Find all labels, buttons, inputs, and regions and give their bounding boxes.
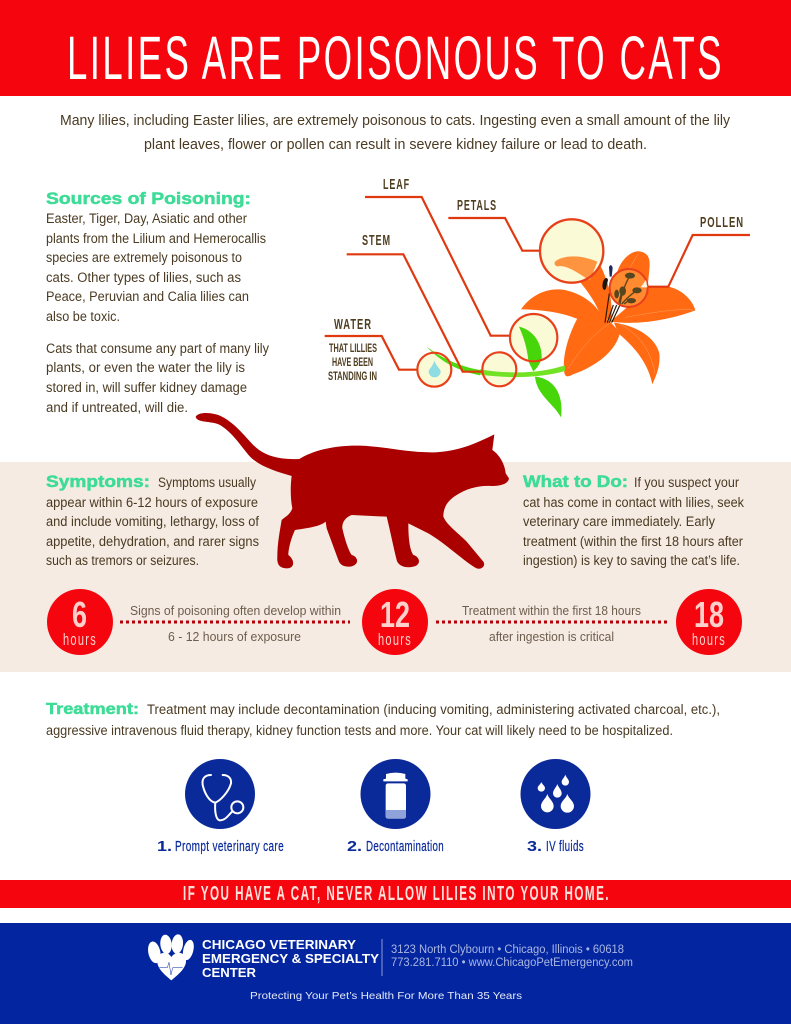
timeline marker: 12 hours: hours [378,630,412,649]
panel: symptoms: appetite, dehydration, and rarer signs [46,534,259,549]
icon: fluid drops [520,759,590,829]
contact details: 773.281.7110 • www.ChicagoPetEmergency.com [391,957,633,969]
panel: what to do: What to Do: [523,473,628,491]
title banner [0,0,791,96]
panel: what to do: If you suspect your [634,475,739,490]
stamens [605,293,620,323]
stem [427,347,565,377]
timeline marker: 12 hours: 12 [380,594,410,635]
panel: symptoms: such as tremors or seizures. [46,553,199,568]
panel: symptoms [46,473,259,568]
panel: what to do: treatment (within the first 18 hours after [523,534,743,549]
panel: treatment: Treatment may include decontamination (inducing vomiting, administering activated charcoal, etc.), [147,702,720,717]
panel: sources of poisoning: Sources of Poisoning: [46,190,251,208]
panel: sources of poisoning: plants from the Lilium and Hemerocallis [46,231,266,246]
panel: sources of poisoning: species are extremely poisonous to [46,250,242,265]
icon labels: Prompt veterinary care [175,839,284,855]
panel: what to do [523,473,744,568]
panel: sources of poisoning: also be toxic. [46,309,120,324]
water drop [429,361,441,377]
icon labels: 2. [347,838,362,855]
timeline captions [130,603,641,644]
panel: what to do: cat has come in contact with lilies, seek [523,495,744,510]
panel: sources of poisoning: Cats that consume any part of many lily [46,341,269,356]
leader lines [325,197,750,387]
panel: sources of poisoning: and if untreated, will die. [46,400,188,415]
warning banner [0,880,791,908]
lily diagram [325,176,750,417]
icon: stethoscope [185,759,255,829]
panel: sources of poisoning: stored in, will suffer kidney damage [46,380,247,395]
diagram labels: STEM [362,232,391,249]
panel: symptoms: Symptoms: [46,473,150,491]
diagram labels: WATER [334,316,372,333]
timeline marker: 18 hours: 18 [694,594,724,635]
panel: treatment: aggressive intravenous fluid therapy, kidney function tests and more. Your cat will likely need to be hospitalized. [46,723,673,738]
diagram labels: STANDING IN [328,371,377,383]
intro text [60,112,730,153]
tagline: Protecting Your Pet’s Health For More Than 35 Years [250,990,522,1002]
panel: sources of poisoning: Peace, Peruvian and Calia lilies can [46,289,249,304]
diagram labels: POLLEN [700,214,744,231]
callout circle: petals [540,219,603,283]
panel: treatment [46,701,720,738]
timeline marker: 12 hours [362,589,428,655]
diagram labels: THAT LILLIES [329,343,377,355]
timeline [47,589,742,655]
callout circle: leaf [510,314,557,361]
callout circle: water [417,353,451,387]
panel: sources of poisoning: Easter, Tiger, Day, Asiatic and other [46,211,247,226]
treatment icons [157,759,590,855]
icon labels: 3. [527,838,542,855]
intro text: Many lilies, including Easter lilies, are extremely poisonous to cats. Ingesting even a small amount of the lily [60,112,730,129]
callout circle: stem [482,352,516,386]
timeline marker: 18 hours [676,589,742,655]
panel: sources of poisoning: cats. Other types of lilies, such as [46,270,241,285]
panel: symptoms: and include vomiting, lethargy, loss of [46,514,259,529]
cat silhouette [196,413,509,569]
center name: CHICAGO VETERINARY [202,938,357,952]
panel: treatment: Treatment: [46,701,139,718]
icon labels: IV fluids [546,839,584,855]
icon labels: 1. [157,838,172,855]
panel: sources of poisoning [46,190,269,415]
diagram labels [328,176,744,383]
timeline captions: 6 - 12 hours of exposure [168,629,301,644]
icon: paw logo [146,934,196,980]
footer [0,923,791,1024]
timeline marker: 18 hours: hours [692,630,726,649]
intro text: plant leaves, flower or pollen can result in severe kidney failure or lead to death. [144,136,647,153]
timeline captions: Treatment within the first 18 hours [462,603,641,618]
icon: medicine bottle [360,759,430,829]
flower petals [521,251,695,384]
beige symptoms band [0,462,791,672]
icon labels [157,838,584,855]
center name: EMERGENCY & SPECIALTY [202,952,380,966]
icon labels: Decontamination [366,839,444,855]
timeline marker: 6 hours: 6 [72,594,87,635]
diagram labels: LEAF [383,176,410,193]
contact details: 3123 North Clybourn • Chicago, Illinois • 60618 [391,944,624,956]
panel: symptoms: appear within 6-12 hours of exposure [46,495,258,510]
diagram labels: HAVE BEEN [332,357,373,369]
panel: what to do: veterinary care immediately. Early [523,514,715,529]
contact details [391,944,633,969]
timeline captions: after ingestion is critical [489,629,614,644]
center name [202,938,380,980]
timeline marker: 6 hours: hours [63,630,97,649]
panel: sources of poisoning: plants, or even the water the lily is [46,360,245,375]
callout circle: pollen [610,269,648,307]
diagram labels: PETALS [457,197,497,214]
panel: what to do: ingestion) is key to saving the cat’s life. [523,553,740,568]
panel: symptoms: Symptoms usually [158,475,256,490]
leaves [519,327,561,417]
center name: CENTER [202,966,256,980]
timeline marker: 6 hours [47,589,113,655]
timeline captions: Signs of poisoning often develop within [130,603,341,618]
